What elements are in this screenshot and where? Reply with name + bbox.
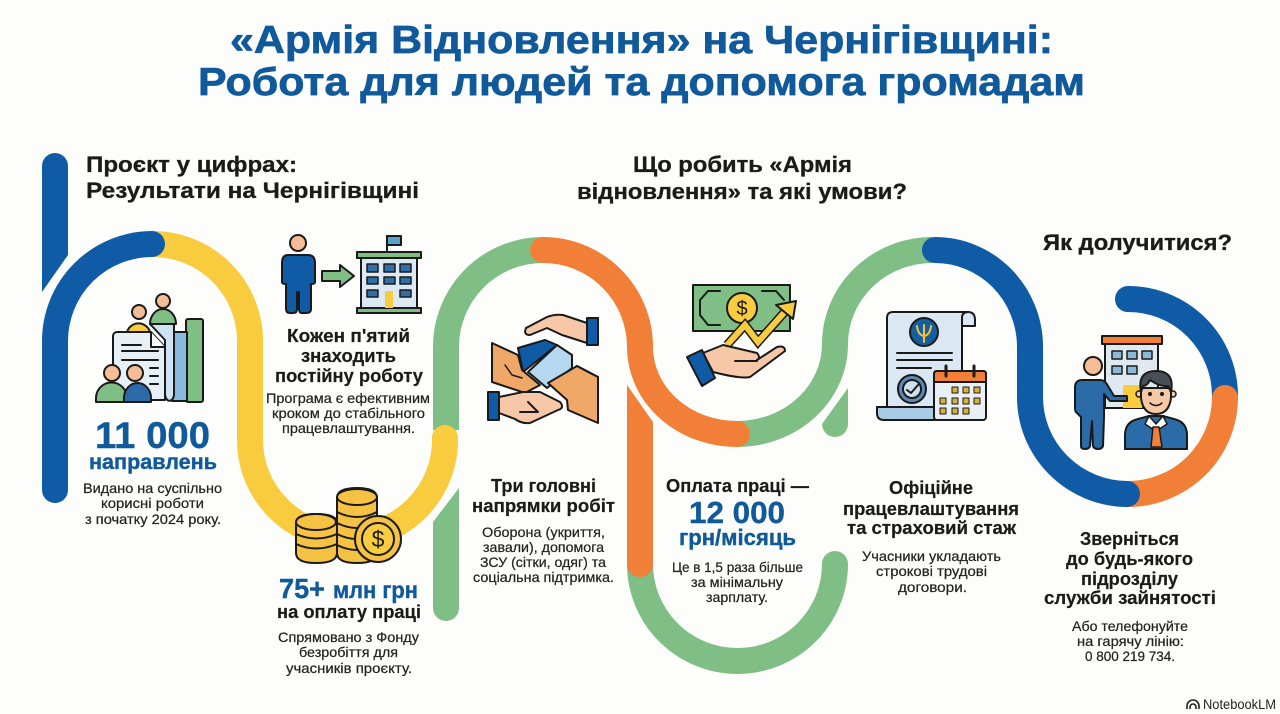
icon: coin stacks: $ [372,526,385,552]
text block: official employment: та страховий стаж [847,517,1017,538]
heading: what the army does: Що робить «Армія [633,152,852,177]
text block: every fifth finds a job: постійну роботу [275,365,424,386]
text block: 11 000 referrals [83,415,222,527]
icon: hand with money and rising arrow: $ [736,298,748,320]
text block: every fifth finds a job: Кожен п'ятий [287,325,410,346]
text block: official employment: Учасники укладають [862,548,1001,564]
icon: contract and calendar [877,312,986,420]
text block: salary: Оплата праці — [666,475,809,496]
text block: contact employment service: Або телефонуйте [1072,618,1188,634]
text block: salary [666,475,809,605]
text block: contact employment service: підрозділу [1081,568,1179,589]
text block: contact employment service: служби зайнятості [1044,587,1216,608]
text block: 75+ million: безробіття для [299,644,398,660]
heading: what the army does [577,152,907,204]
text block: salary: Це в 1,5 раза більше [672,559,803,575]
heading: project in numbers: Проєкт у цифрах: [86,152,297,177]
heading: how to join: Як долучитися? [1043,230,1232,255]
text block: 75+ million: Спрямовано з Фонду [278,629,419,645]
text block: contact employment service: Зверніться [1080,528,1179,549]
text block: official employment: строкові трудові [876,563,987,579]
text block: three main directions: ЗСУ (сітки, одяг) та [480,554,606,570]
title: «Армія Відновлення» на Чернігівщині: [230,19,1053,62]
text block: salary: зарплату. [706,589,768,605]
text block: contact employment service: на гарячу лінію: [1077,633,1184,649]
text block: three main directions [472,475,615,585]
text block: 11 000 referrals: Видано на суспільно [83,480,222,496]
text block: 11 000 referrals: корисні роботи [101,495,204,511]
title: Робота для людей та допомога громадам [198,61,1085,104]
icon: coin stacks [296,488,401,563]
text block: official employment [843,477,1019,595]
icon: hand with money and rising arrow [687,285,796,386]
text block: 75+ million: млн грн [333,577,418,603]
icon: people and documents [96,294,203,402]
text block: salary: за мінімальну [691,574,783,590]
text block: every fifth finds a job: Програма є ефективним [266,390,430,406]
text block: 75+ million: на оплату праці [277,601,421,622]
text block: 11 000 referrals: направлень [89,451,217,474]
text block: three main directions: завали), допомога [483,539,604,555]
text block: 75+ million [277,573,421,676]
text block: every fifth finds a job: кроком до стабільного [272,405,425,421]
text block: three main directions: Три головні [491,475,596,496]
text block: every fifth finds a job: працевлаштування. [282,420,415,436]
text block: contact employment service: до будь-якого [1066,548,1193,569]
text block: 75+ million: учасників проєкту. [286,660,412,676]
text block: official employment: договори. [898,579,967,595]
text block: 11 000 referrals: 11 000 [95,415,210,456]
text block: contact employment service [1044,528,1216,664]
text block: every fifth finds a job: знаходить [301,345,396,366]
icon: person at employment office with consultant [1075,336,1187,449]
text block: salary: грн/місяць [679,525,796,550]
text block: official employment: Офіційне [889,477,973,498]
heading: project in numbers [86,152,419,203]
icon: person moving to building [282,235,421,313]
icon: hands rebuilding house [488,315,598,423]
text block: salary: 12 000 [689,495,785,530]
text block: 11 000 referrals: з початку 2024 року. [85,511,221,527]
text block: three main directions: соціальна підтримка. [473,569,614,585]
text block: official employment: працевлаштування [843,498,1019,519]
title [198,19,1085,104]
text block: 75+ million: 75+ [279,573,325,604]
text block: contact employment service: 0 800 219 734. [1085,648,1175,664]
text block: every fifth finds a job [266,325,430,436]
text block: three main directions: Оборона (укриття, [482,524,605,540]
text block: three main directions: напрямки робіт [472,495,615,516]
heading: what the army does: відновлення» та які умови? [577,179,907,204]
winding ribbon path [42,153,1225,661]
heading: project in numbers: Результати на Чернігівщині [86,178,419,203]
